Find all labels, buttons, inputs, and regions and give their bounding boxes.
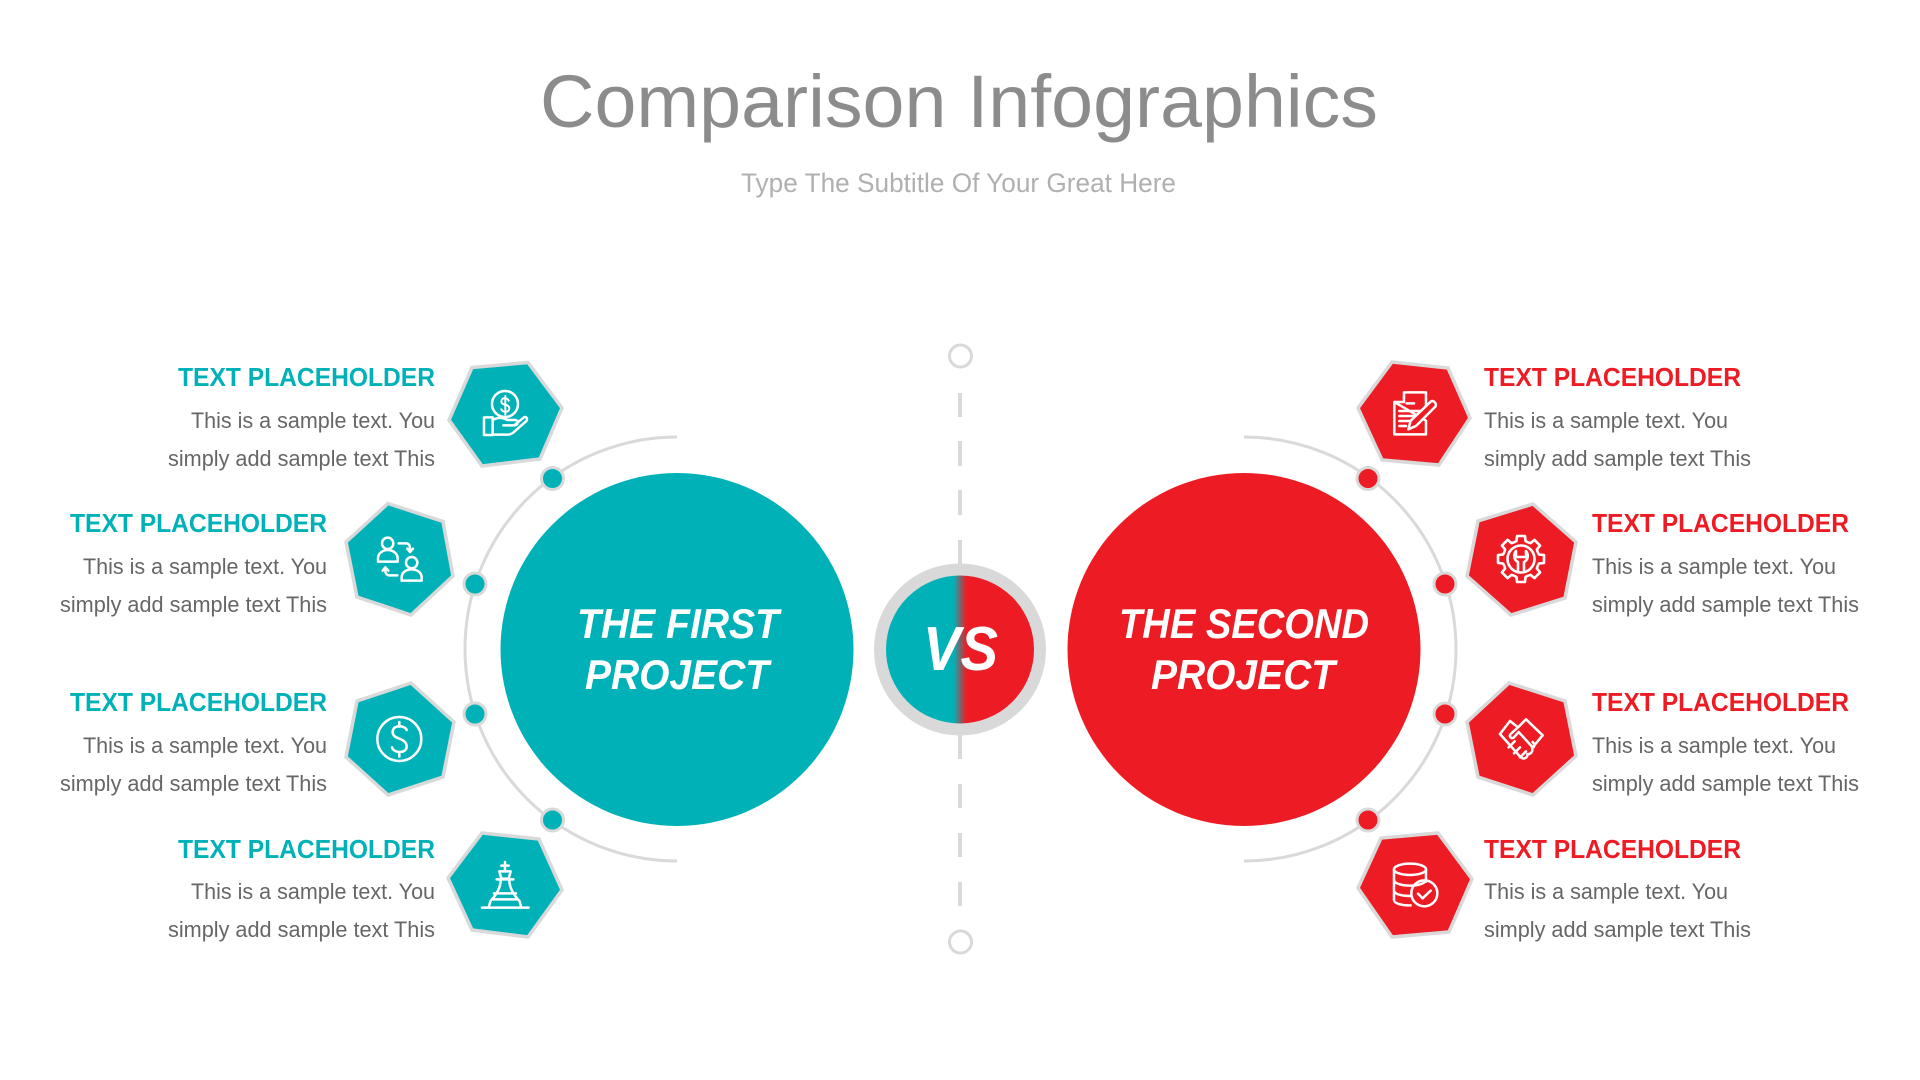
text block xyxy=(1484,834,1751,942)
text block xyxy=(1592,687,1859,796)
text block: TEXT PLACEHOLDER xyxy=(70,687,327,717)
text block: simply add sample text This xyxy=(1484,446,1751,471)
VS badge: VS xyxy=(923,615,998,684)
text block: TEXT PLACEHOLDER xyxy=(1484,834,1741,864)
first project circle xyxy=(500,473,854,826)
text block: TEXT PLACEHOLDER xyxy=(178,362,435,392)
second project arc xyxy=(1244,437,1456,861)
text block: TEXT PLACEHOLDER xyxy=(1592,508,1849,538)
connector dots xyxy=(1357,468,1456,831)
text block: simply add sample text This xyxy=(168,446,435,471)
panel: first project xyxy=(60,362,854,942)
icon: gear with wrench xyxy=(1498,536,1544,582)
text block: This is a sample text. You xyxy=(1484,879,1728,904)
text block: TEXT PLACEHOLDER xyxy=(70,508,327,538)
text block xyxy=(168,834,435,942)
icon: document with pencil xyxy=(1394,392,1436,434)
VS badge xyxy=(880,570,1040,730)
icon: chess piece xyxy=(482,862,529,908)
item: left 3 xyxy=(60,683,454,796)
text block xyxy=(1484,362,1751,471)
second project label xyxy=(1119,600,1369,698)
second project circle xyxy=(1068,473,1420,826)
panel: second project xyxy=(1068,362,1859,942)
item: left 4 xyxy=(168,833,562,942)
text block xyxy=(1592,508,1859,617)
center dashed divider xyxy=(950,345,972,953)
text block: TEXT PLACEHOLDER xyxy=(1484,362,1741,392)
text block: This is a sample text. You xyxy=(1484,408,1728,433)
text block: simply add sample text This xyxy=(60,592,327,617)
text block: This is a sample text. You xyxy=(83,733,327,758)
icon: dollar circle xyxy=(377,717,421,761)
second project label: THE SECOND xyxy=(1119,600,1369,647)
item: right 3 xyxy=(1467,683,1859,796)
first project label: THE FIRST xyxy=(577,600,782,647)
text block: simply add sample text This xyxy=(1484,917,1751,942)
text block: TEXT PLACEHOLDER xyxy=(1592,687,1849,717)
text block: This is a sample text. You xyxy=(1592,554,1836,579)
item: right 2 xyxy=(1467,504,1859,617)
first project label xyxy=(577,600,782,698)
icon: people exchange xyxy=(378,538,422,581)
text block: This is a sample text. You xyxy=(191,408,435,433)
title: Comparison Infographics xyxy=(540,60,1378,143)
first project arc xyxy=(465,437,677,861)
text block xyxy=(60,687,327,796)
item: left 1 xyxy=(168,362,562,471)
icon: database with check xyxy=(1394,864,1437,906)
subtitle: Type The Subtitle Of Your Great Here xyxy=(741,168,1176,198)
icon: hand with coin xyxy=(484,391,527,435)
text block: This is a sample text. You xyxy=(1592,733,1836,758)
connector dots xyxy=(464,468,564,831)
item: right 1 xyxy=(1358,362,1751,471)
icon: handshake xyxy=(1500,719,1543,758)
text block xyxy=(60,508,327,617)
second project label: PROJECT xyxy=(1151,651,1338,698)
text block: simply add sample text This xyxy=(168,917,435,942)
text block: simply add sample text This xyxy=(60,771,327,796)
text block: This is a sample text. You xyxy=(83,554,327,579)
text block: TEXT PLACEHOLDER xyxy=(178,834,435,864)
text block xyxy=(168,362,435,471)
item: right 4 xyxy=(1358,833,1751,942)
item: left 2 xyxy=(60,504,453,617)
text block: simply add sample text This xyxy=(1592,771,1859,796)
first project label: PROJECT xyxy=(585,651,772,698)
text block: This is a sample text. You xyxy=(191,879,435,904)
text block: simply add sample text This xyxy=(1592,592,1859,617)
